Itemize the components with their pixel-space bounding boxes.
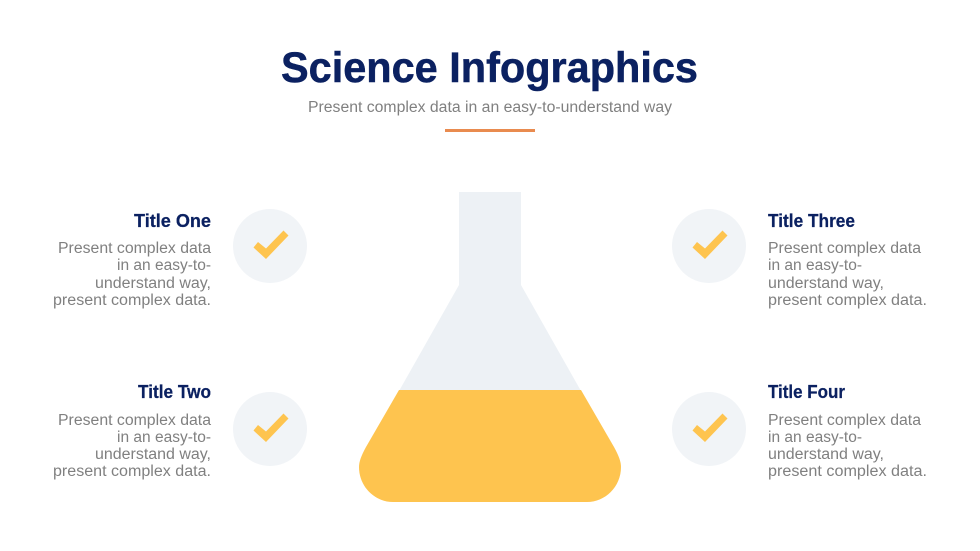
text block: Title Three: in an easy-to- [768,257,862,274]
text block: Title Four: in an easy-to- [768,429,862,446]
orange accent line [445,129,535,132]
icon: check circle one [233,209,307,283]
text block: Title Two: understand way, [95,446,211,463]
flask illustration [359,192,621,502]
text block: Title Two [53,381,212,480]
text block: Title Two: Present complex data [58,412,212,429]
text block: Title Three: Title Three [768,210,855,231]
title: Science Infographics [281,44,698,92]
text block: Title Two: in an easy-to- [117,429,211,446]
text block: Title Four: present complex data. [768,463,927,480]
icon: check circle four [672,392,746,466]
text block: Title Four: Title Four [768,381,845,402]
text block: Title One: understand way, [95,275,211,292]
text block: Title One [53,210,212,309]
text block: Title Three: Present complex data [768,240,922,257]
flask yellow liquid [359,390,621,502]
text block: Title Four: understand way, [768,446,884,463]
text block: Title Three: present complex data. [768,292,927,309]
text block: Title Three: understand way, [768,275,884,292]
icon: check circle three [672,209,746,283]
text block: Title Four: Present complex data [768,412,922,429]
text block: Title Two: Title Two [138,381,211,402]
text block: Title One: present complex data. [53,292,211,309]
text block: Title One: Title One [134,210,211,231]
flask glass body [399,192,581,391]
subtitle: Present complex data in an easy-to-understand way [308,99,672,116]
text block: Title Three [768,210,927,309]
text block: Title One: in an easy-to- [117,257,211,274]
icon: check circle two [233,392,307,466]
text block: Title Four [768,381,927,480]
text block: Title One: Present complex data [58,240,212,257]
text block: Title Two: present complex data. [53,463,211,480]
